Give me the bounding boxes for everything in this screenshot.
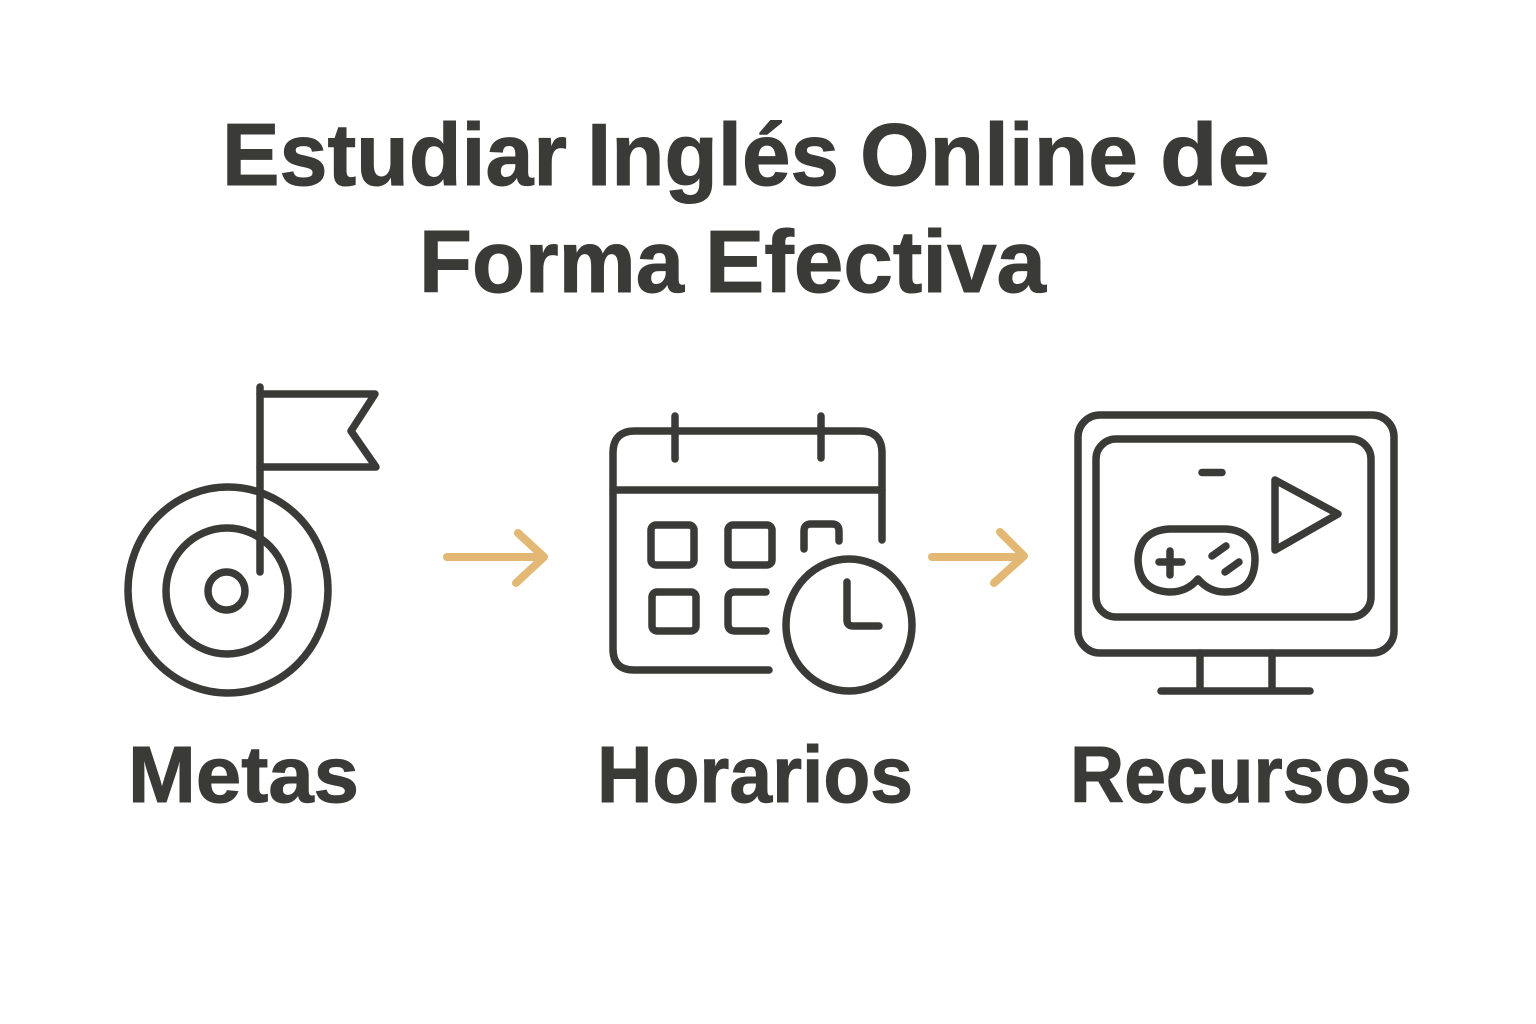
label: Metas: Metas <box>128 730 359 819</box>
title <box>222 105 1270 311</box>
title: Inglés <box>587 105 839 204</box>
arrow: metas to horarios <box>447 533 544 583</box>
title: de <box>1160 105 1270 204</box>
title: Forma <box>419 212 685 311</box>
title: Efectiva <box>705 212 1047 311</box>
icon: calendar with clock <box>613 416 912 691</box>
label: Horarios: Horarios <box>597 730 913 819</box>
title: Online <box>860 105 1138 204</box>
icon: monitor with game controller and play button <box>1078 415 1394 691</box>
icon: target with flag <box>128 387 376 693</box>
title: Estudiar <box>222 105 567 204</box>
arrow: horarios to recursos <box>932 532 1024 583</box>
label: Recursos: Recursos <box>1070 730 1412 819</box>
